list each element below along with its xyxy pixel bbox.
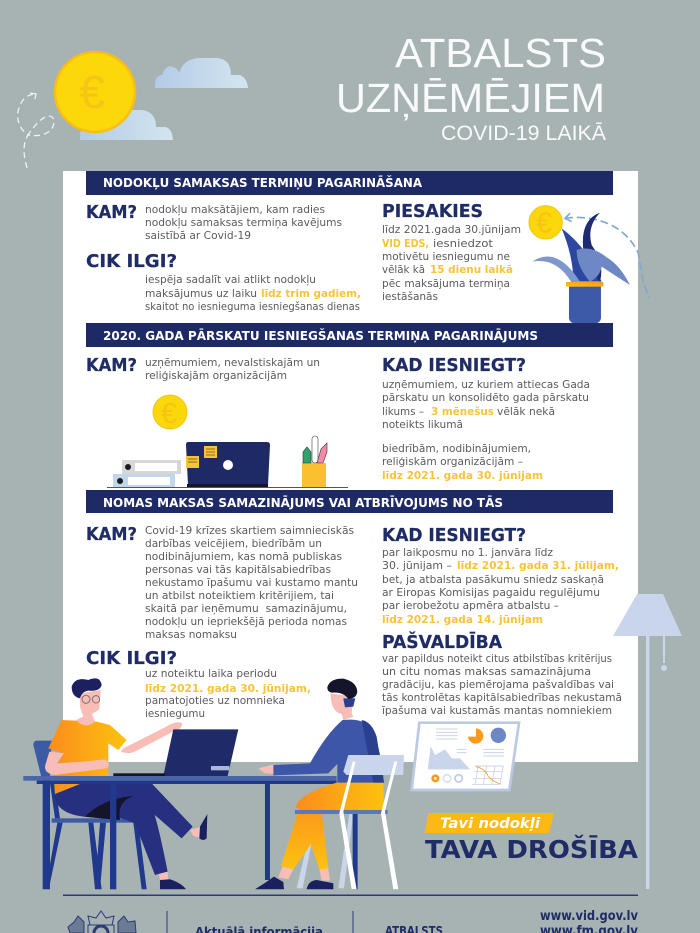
right chair bbox=[295, 755, 404, 889]
section 1: KAM: nodokļu maksātājiem, kam radies bbox=[145, 204, 325, 216]
section 1: KAM: nodokļu samaksas termiņa kavējums bbox=[145, 217, 342, 229]
illustration: wall chart board bbox=[412, 723, 519, 790]
section 1: KAM bbox=[86, 203, 342, 242]
illustration: desk with laptop, binders, pens, coin: € bbox=[161, 398, 177, 430]
section 3: KAD IESNIEGT bbox=[382, 526, 619, 626]
section 3: PAŠVALDĪBA: tās kontrolētas kapitālsabiedrības nekustamā bbox=[382, 692, 622, 704]
section 3: PAŠVALDĪBA bbox=[381, 631, 622, 717]
section 1: PIESAKIES: vēlāk kā bbox=[382, 264, 425, 276]
icon: plant with coin bbox=[529, 206, 650, 323]
section 1 heading bar bbox=[86, 171, 613, 195]
section 3: KAD IESNIEGT: līdz 2021. gada 14. jūnijam bbox=[382, 614, 543, 626]
section 3: KAM: personas vai tās kapitālsabiedrības bbox=[145, 564, 331, 576]
section 3: CIK ILGI: līdz 2021. gada 30. jūnijam, bbox=[145, 683, 311, 695]
icon: lower cloud bbox=[80, 110, 173, 140]
section 1: PIESAKIES: VID EDS, bbox=[382, 238, 429, 250]
section 2: KAD IESNIEGT: līdz 2021. gada 30. jūnijam bbox=[382, 470, 543, 482]
section 2: KAD IESNIEGT: 3 mēnešus bbox=[431, 406, 494, 418]
section 2: KAD IESNIEGT: likums – bbox=[382, 406, 424, 418]
illustration: two people at a table bbox=[23, 678, 404, 889]
left chair bbox=[33, 741, 147, 889]
section 3: KAM: maksas nomaksu bbox=[145, 629, 237, 641]
section 1: CIK ILGI: CIK ILGI? bbox=[86, 252, 177, 272]
section 2: KAM: reliģiskajām organizācijām bbox=[145, 370, 287, 382]
section 2 heading bar bbox=[86, 323, 613, 347]
section 3: KAM bbox=[86, 525, 358, 641]
footer crest bbox=[68, 911, 136, 933]
dashed flight path bbox=[18, 93, 54, 168]
section 3 heading bar bbox=[86, 490, 613, 513]
section 3: PAŠVALDĪBA: PAŠVALDĪBA bbox=[382, 631, 503, 653]
section 1: PIESAKIES: līdz 2021.gada 30.jūnijam bbox=[382, 224, 521, 236]
section 3: KAM: Covid-19 krīzes skartiem saimnieciskās bbox=[145, 525, 354, 537]
section 1: KAM: KAM? bbox=[86, 203, 137, 223]
section 1: PIESAKIES: motivētu iesniegumu ne bbox=[382, 251, 510, 263]
section 2: KAD IESNIEGT: vēlāk nekā bbox=[497, 406, 555, 418]
section 1: PIESAKIES: iestāšanās bbox=[382, 291, 438, 303]
section 3: KAD IESNIEGT: bet, ja atbalsta pasākumu sniedz saskaņā bbox=[382, 574, 604, 586]
section 3: KAD IESNIEGT: par laikposmu no 1. janvāra līdz bbox=[382, 547, 553, 559]
section 3: KAD IESNIEGT: līdz 2021. gada 31. jūlijam, bbox=[457, 560, 619, 572]
section 2: KAD IESNIEGT: pārskatu un konsolidēto gada pārskatu bbox=[382, 392, 589, 404]
right chair rear legs bbox=[297, 814, 353, 888]
title: UZŅĒMĒJIEM bbox=[336, 75, 605, 121]
section 3: PAŠVALDĪBA: gradāciju, kas piemērojama pašvaldības vai bbox=[382, 679, 614, 691]
section 2: KAD IESNIEGT: noteikts likumā bbox=[382, 419, 463, 431]
table bbox=[23, 776, 337, 889]
section 3: KAM: nodokļu un iepriekšējā perioda nomas bbox=[145, 616, 347, 628]
icon: plant with coin: € bbox=[536, 208, 552, 240]
footer separators bbox=[167, 911, 353, 933]
section 2: KAM: KAM? bbox=[86, 356, 137, 376]
title: COVID-19 LAIKĀ bbox=[441, 122, 606, 145]
section 2: KAD IESNIEGT: reliģiskām organizācijām – bbox=[382, 456, 523, 468]
section 3: KAD IESNIEGT: 30. jūnijam – bbox=[382, 560, 452, 572]
section 3: CIK ILGI: uz noteiktu laika periodu bbox=[145, 668, 277, 680]
section 2: KAD IESNIEGT bbox=[382, 356, 590, 482]
section 2: KAM bbox=[86, 356, 320, 382]
section 3: CIK ILGI: iesniegumu bbox=[145, 708, 205, 720]
icon: floor lamp bbox=[613, 594, 682, 889]
section 3: PAŠVALDĪBA: īpašuma vai kustamās mantas nomniekiem bbox=[381, 705, 612, 717]
right man bbox=[255, 679, 384, 889]
section 1: CIK ILGI: iespēja sadalīt vai atlikt nodokļu bbox=[145, 274, 316, 286]
section 1: KAM: saistībā ar Covid-19 bbox=[145, 230, 251, 242]
footer divider bbox=[63, 894, 638, 896]
section 3: KAM: skaitā par ieņēmumu samazinājumu, bbox=[145, 603, 347, 615]
left man torso bbox=[45, 678, 182, 794]
section 1: CIK ILGI bbox=[86, 252, 361, 313]
section 3: KAD IESNIEGT: par ierobežotu apmēra atbalstu – bbox=[382, 600, 559, 612]
section 1: CIK ILGI: skaitot no iesnieguma iesniegšanas dienas bbox=[145, 301, 360, 313]
section 3: KAM: un atbilst noteiktiem kritērijiem, tai bbox=[145, 590, 334, 602]
section 1: CIK ILGI: līdz trim gadiem, bbox=[261, 288, 361, 300]
laptop bbox=[113, 729, 238, 776]
section 1: CIK ILGI: maksājumus uz laiku bbox=[145, 288, 257, 300]
section 3: PAŠVALDĪBA: var papildus noteikt citus atbilstības kritērijus bbox=[382, 653, 612, 665]
footer: website links bbox=[540, 909, 638, 933]
section 1 heading bar: NODOKĻU SAMAKSAS TERMIŅU PAGARINĀŠANA bbox=[103, 175, 423, 190]
slogan badge bbox=[425, 813, 554, 833]
section 2: KAD IESNIEGT: biedrībām, nodibinājumiem, bbox=[382, 443, 531, 455]
section 3: KAM: KAM? bbox=[86, 525, 137, 545]
section 3: KAD IESNIEGT: ar Eiropas Komisijas pagaidu regulējumu bbox=[382, 587, 600, 599]
slogan badge: Tavi nodokļi bbox=[440, 816, 540, 832]
icon: large euro coin: € bbox=[79, 66, 105, 118]
title bbox=[336, 30, 606, 145]
illustration: desk with laptop, binders, pens, coin bbox=[107, 395, 348, 488]
footer: website links: www.vid.gov.lv bbox=[540, 909, 638, 924]
section 1: PIESAKIES: 15 dienu laikā bbox=[430, 264, 513, 276]
section 1: PIESAKIES: iesniedzot bbox=[433, 238, 493, 250]
section 1: PIESAKIES: pēc maksājuma termiņa bbox=[382, 278, 510, 290]
section 1: PIESAKIES: PIESAKIES bbox=[382, 202, 483, 222]
section 3: CIK ILGI: CIK ILGI? bbox=[86, 649, 177, 669]
section 3: KAD IESNIEGT: KAD IESNIEGT? bbox=[382, 526, 526, 546]
section 2: KAM: uzņēmumiem, nevalstiskajām un bbox=[145, 357, 320, 369]
section 3: CIK ILGI bbox=[86, 649, 311, 720]
white content panel bbox=[63, 171, 638, 762]
section 3: PAŠVALDĪBA: un citu nomas maksas samazinājuma bbox=[382, 666, 591, 678]
left man legs bbox=[55, 783, 207, 889]
section 2 heading bar: 2020. GADA PĀRSKATU IESNIEGŠANAS TERMIŅA PAGARINĀJUMS bbox=[103, 328, 538, 343]
section 1: PIESAKIES bbox=[382, 202, 521, 303]
section 3: KAM: darbības veicējiem, biedrībām un bbox=[145, 538, 322, 550]
section 3: CIK ILGI: pamatojoties uz nomnieka bbox=[145, 695, 285, 707]
section 3: KAM: nodibinājumiem, kas nomā publiskas bbox=[145, 551, 342, 563]
section 3 heading bar: NOMAS MAKSAS SAMAZINĀJUMS VAI ATBRĪVOJUMS NO TĀS bbox=[103, 496, 503, 510]
icon: large euro coin bbox=[55, 52, 135, 132]
section 3: KAM: nekustamo īpašumu vai kustamo mantu bbox=[145, 577, 358, 589]
slogan text: TAVA DROŠĪBA bbox=[425, 834, 639, 864]
icon: upper cloud bbox=[155, 58, 248, 88]
section 2: KAD IESNIEGT: KAD IESNIEGT? bbox=[382, 356, 526, 376]
section 2: KAD IESNIEGT: uzņēmumiem, uz kuriem attiecas Gada bbox=[382, 379, 590, 391]
title: ATBALSTS bbox=[395, 30, 606, 76]
